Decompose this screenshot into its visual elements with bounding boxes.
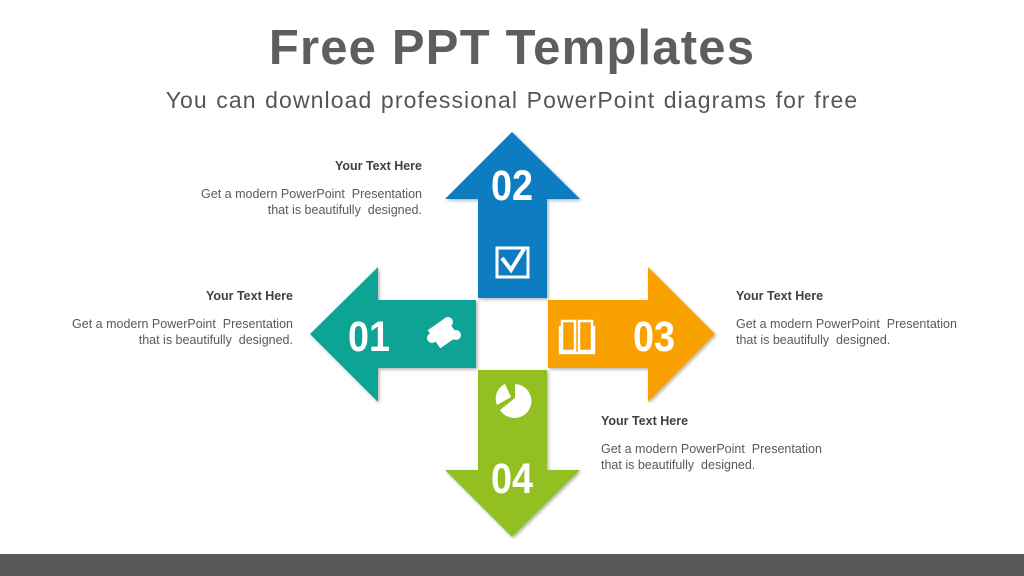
text block 03: Your Text Here bbox=[736, 289, 823, 303]
subtitle: You can download professional PowerPoint diagrams for free bbox=[166, 87, 858, 113]
text block 02: Get a modern PowerPoint Presentation bbox=[201, 187, 422, 201]
arrow 02 up bbox=[445, 132, 580, 298]
title: Free PPT Templates bbox=[269, 21, 755, 75]
text block 01 bbox=[72, 289, 293, 347]
arrow 02 up: 02 bbox=[491, 161, 533, 210]
arrow 03 right: 03 bbox=[633, 312, 675, 361]
text block 02 bbox=[201, 159, 422, 217]
text block 02: that is beautifully designed. bbox=[268, 203, 422, 217]
text block 03: that is beautifully designed. bbox=[736, 333, 890, 347]
icon: puzzle bbox=[427, 317, 461, 348]
text block 01: that is beautifully designed. bbox=[139, 333, 293, 347]
arrow 01 left: 01 bbox=[348, 312, 390, 361]
text block 04: that is beautifully designed. bbox=[601, 458, 755, 472]
icon: book bbox=[560, 321, 594, 353]
arrow 01 left bbox=[310, 267, 476, 402]
arrow 04 down: 04 bbox=[491, 454, 533, 503]
text block 04: Your Text Here bbox=[601, 414, 688, 428]
text block 04 bbox=[601, 414, 822, 472]
text block 03: Get a modern PowerPoint Presentation bbox=[736, 317, 957, 331]
arrow 03 right bbox=[548, 267, 715, 402]
icon: pie chart bbox=[496, 384, 531, 418]
text block 03 bbox=[736, 289, 957, 347]
text block 04: Get a modern PowerPoint Presentation bbox=[601, 442, 822, 456]
text block 02: Your Text Here bbox=[335, 159, 422, 173]
icon: checkbox bbox=[497, 248, 528, 277]
footer bar bbox=[0, 554, 1024, 576]
text block 01: Get a modern PowerPoint Presentation bbox=[72, 317, 293, 331]
arrow 04 down bbox=[445, 370, 580, 537]
text block 01: Your Text Here bbox=[206, 289, 293, 303]
